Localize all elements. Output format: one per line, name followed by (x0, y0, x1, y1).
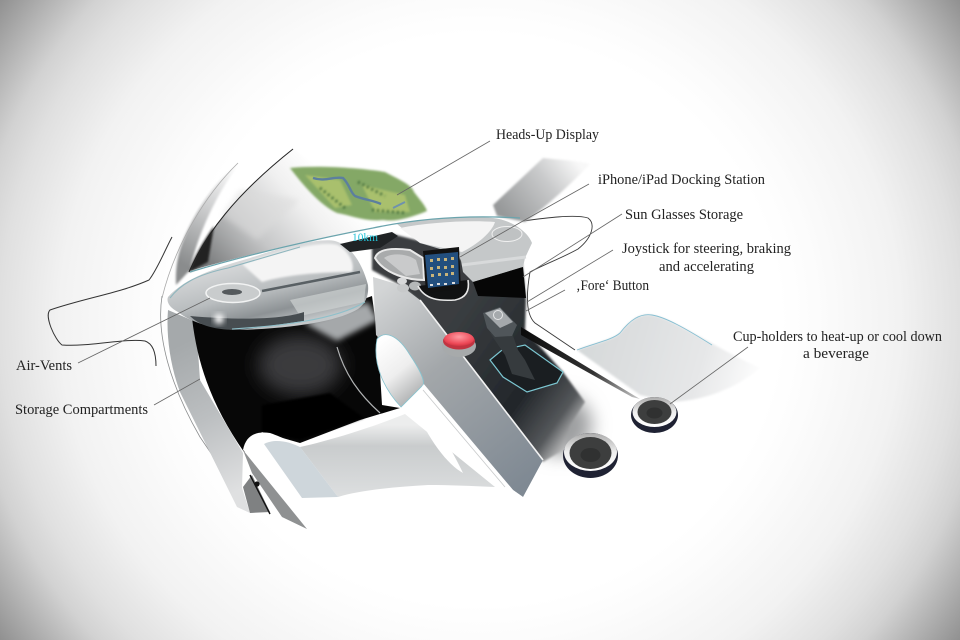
label: Storage Compartments: Storage Compartments (15, 402, 148, 418)
fore button (442, 332, 476, 357)
console side band (373, 277, 543, 497)
phone dock (375, 249, 468, 300)
footwell storage compartment (192, 296, 400, 452)
lower centre seat (243, 385, 523, 498)
label: Joystick line two: and accelerating (659, 259, 754, 275)
distance readout (340, 230, 398, 252)
heads-up display map (290, 167, 427, 221)
dark centre console (372, 234, 585, 462)
inner armrest (376, 335, 423, 407)
label: Heads-Up Display: Heads-Up Display (496, 127, 600, 143)
right door pillar (493, 158, 590, 222)
tablet (423, 247, 461, 293)
label: Joystick line one: Joystick for steering, braking (622, 241, 791, 257)
windshield pane (189, 148, 378, 272)
label: Sun Glasses Storage: Sun Glasses Storage (625, 207, 743, 223)
joystick with tray (483, 307, 563, 392)
icon: left air-vent (206, 284, 260, 302)
door handle (243, 450, 307, 529)
dark door sill (521, 327, 640, 399)
leader lines (78, 141, 748, 405)
label: iPhone/iPad Docking Station: iPhone/iPad Docking Station (598, 172, 765, 188)
label: Fore Button: ‚Fore‘ Button (576, 278, 649, 294)
shadow below console (528, 395, 592, 455)
cup-holder large (563, 433, 618, 478)
left pillar and door edge (161, 163, 250, 513)
dash top line (190, 217, 520, 272)
left dash pod (167, 240, 368, 330)
cup-holder small (631, 397, 678, 433)
right dash pod (397, 217, 532, 298)
icon: right air-vent (492, 226, 522, 242)
label: Cup-holders line two: a beverage (803, 346, 869, 362)
label: Air-Vents: Air-Vents (16, 358, 72, 374)
car body outline right (523, 216, 592, 350)
car body outline left (48, 237, 172, 366)
distance readout: 10km (352, 230, 379, 244)
label: Cup-holders line one: Cup-holders to heat-up or cool down (733, 329, 942, 345)
right seat (577, 315, 760, 402)
